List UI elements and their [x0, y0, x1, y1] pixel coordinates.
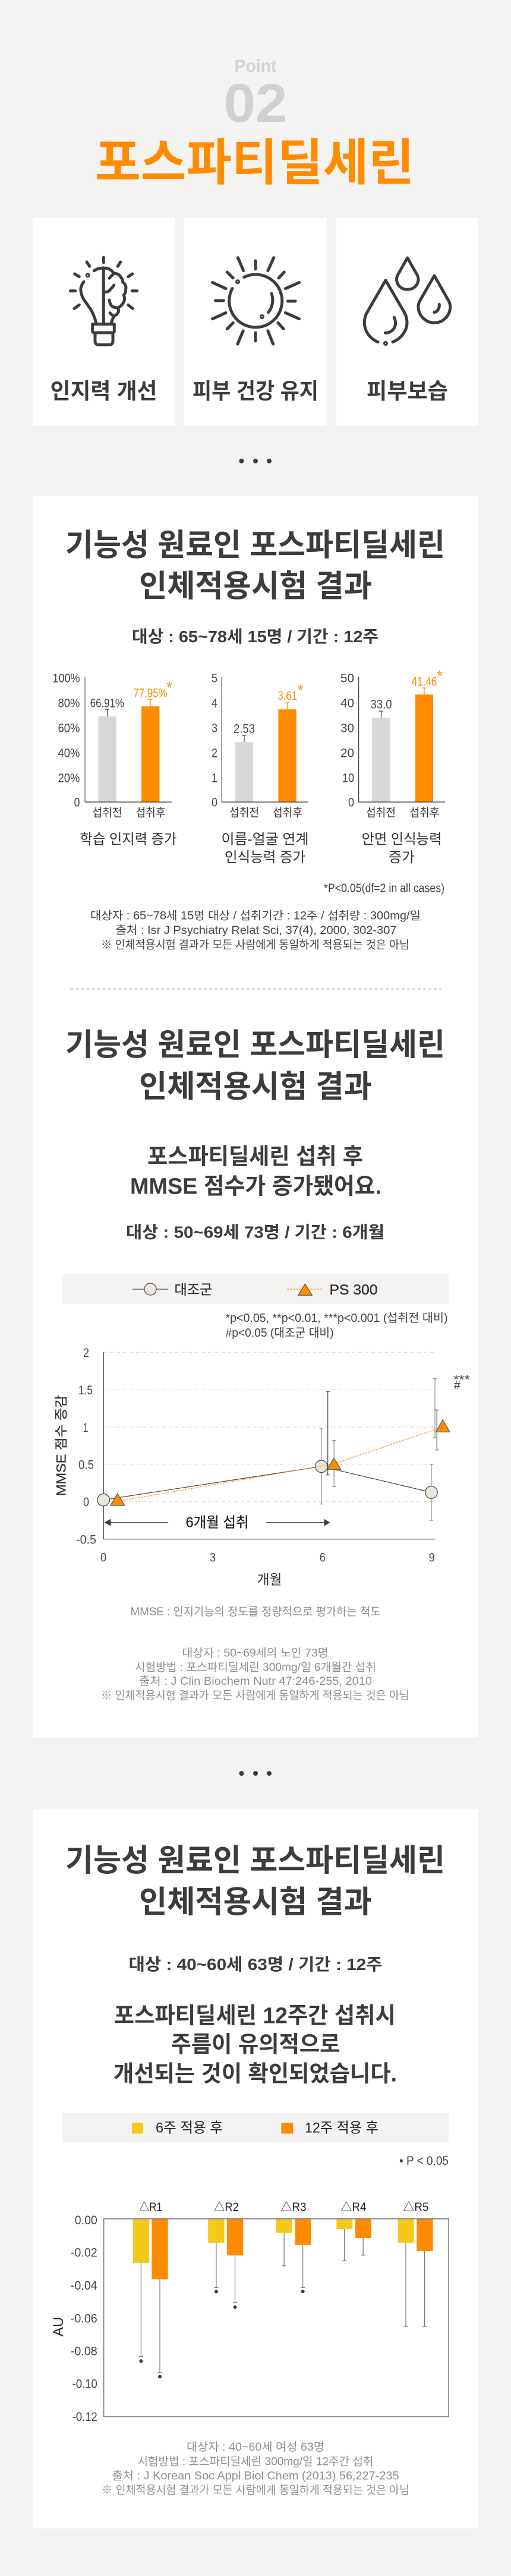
arrow: 6 month intake: 6개월 섭취 — [186, 1515, 249, 1530]
panel: clinical results 1 and 2 — [33, 496, 478, 1737]
line chart: MMSE change: 0.5 — [78, 1458, 94, 1472]
significance notes: #p<0.05 (대조군 대비) — [226, 1326, 334, 1340]
bar chart: learning cognition: 77.95% — [133, 686, 168, 700]
bar chart: facial recognition: 섭취전 — [366, 806, 396, 819]
study notes: ※ 인체적용시험 결과가 모든 사람에게 동일하게 적용되는 것은 아님 — [101, 939, 409, 952]
study notes: 출처 : J Clin Biochem Nutr 47:246-255, 2010 — [139, 1675, 372, 1688]
study notes: 대상자 : 65~78세 15명 대상 / 섭취기간 : 12주 / 섭취량 : 300mg/일 — [90, 909, 421, 922]
wrinkle statement: 개선되는 것이 확인되었습니다. — [113, 2062, 397, 2086]
bar chart: learning cognition: 섭취전 — [93, 806, 122, 819]
bar chart: name-face recognition: 2.53 — [234, 721, 255, 735]
heading: first trial — [65, 529, 445, 604]
heading: third trial — [65, 1844, 445, 1920]
line chart: MMSE change: 0 — [100, 1551, 106, 1565]
card label: 인지력 개선 — [50, 379, 157, 403]
line chart: MMSE change: 3 — [210, 1551, 216, 1565]
bar chart: facial recognition: * — [437, 667, 443, 684]
y axis ticks: -0.10 — [72, 2376, 97, 2391]
significance notes — [226, 1311, 448, 1340]
bar chart: learning cognition: 섭취후 — [135, 806, 165, 819]
heading: second trial — [65, 1028, 445, 1104]
bar chart: name-face recognition: 0 — [212, 795, 217, 809]
trial subject line: 대상 : 65~78세 15명 / 기간 : 12주 — [132, 627, 378, 646]
study notes: 대상자 : 40~60세 여성 63명 — [187, 2441, 324, 2454]
card: moisturizing — [336, 218, 478, 426]
heading: third trial: 기능성 원료인 포스파티딜세린 — [65, 1844, 445, 1879]
chart captions — [80, 832, 442, 866]
column labels — [139, 2201, 429, 2214]
benefit cards — [33, 218, 478, 426]
bar chart: name-face recognition: 4 — [212, 696, 217, 711]
PS 300 series — [111, 1420, 450, 1505]
bar chart: name-face recognition: 섭취후 — [273, 806, 302, 819]
significance marks: # — [454, 1378, 460, 1393]
heading: second trial: 기능성 원료인 포스파티딜세린 — [65, 1028, 445, 1063]
bar chart: facial recognition: 10 — [342, 771, 354, 785]
icon: light bulb with brain — [70, 257, 137, 345]
significance marks: *** — [453, 1372, 471, 1387]
y axis title: AU — [51, 2317, 67, 2337]
card: skin health — [184, 218, 327, 426]
chart legend: 대조군 — [175, 1282, 213, 1298]
bar chart: learning cognition: 0 — [74, 795, 80, 809]
column labels: △R1 — [139, 2201, 162, 2214]
line chart: MMSE change: 1 — [83, 1420, 88, 1435]
bar chart: facial recognition — [340, 667, 445, 819]
study notes: 출처 : J Korean Soc Appl Biol Chem (2013) 56,227-235 — [112, 2470, 399, 2483]
line chart: MMSE change: 9 — [429, 1551, 435, 1565]
line chart: MMSE change: 6 — [320, 1551, 326, 1565]
chart legend — [62, 2113, 449, 2143]
main title: 포스파티딜세린 — [95, 135, 414, 191]
study notes — [101, 1647, 409, 1702]
bar chart: learning cognition: 60% — [58, 721, 80, 735]
bar chart: name-face recognition: 3 — [212, 721, 217, 735]
heading: first trial: 인체적용시험 결과 — [139, 570, 372, 604]
error bars — [139, 2229, 427, 2373]
bar chart: name-face recognition: 3.61 — [277, 689, 297, 703]
x axis title: 개월 — [257, 1572, 282, 1587]
bar chart: facial recognition: 20 — [340, 746, 354, 760]
plot frame — [104, 2219, 449, 2417]
heading: third trial: 인체적용시험 결과 — [139, 1886, 372, 1920]
chart captions: 인식능력 증가 — [225, 850, 305, 866]
card label: 피부보습 — [367, 379, 448, 403]
significance note: • P < 0.05 — [399, 2154, 449, 2168]
bar chart: name-face recognition: * — [298, 681, 304, 699]
chart legend: 6주 적용 후 — [156, 2120, 223, 2136]
line chart: MMSE change: -0.5 — [76, 1533, 96, 1547]
study notes — [102, 2441, 409, 2496]
column labels: △R4 — [341, 2201, 366, 2214]
bar chart: facial recognition: 0 — [348, 795, 354, 809]
column labels: △R3 — [280, 2201, 307, 2214]
significance marks — [453, 1372, 471, 1393]
significance note: *P<0.05(df=2 in all cases) — [324, 882, 444, 895]
MMSE statement: 포스파티딜세린 섭취 후 — [147, 1144, 363, 1169]
y axis ticks: 0.00 — [75, 2213, 97, 2227]
line chart: MMSE change: 2 — [83, 1346, 89, 1360]
y axis ticks: -0.06 — [71, 2311, 97, 2325]
y axis ticks: -0.08 — [71, 2344, 97, 2359]
bar chart: learning cognition: 66.91% — [90, 696, 124, 711]
MMSE definition: MMSE : 인지기능의 정도를 정량적으로 평가하는 척도 — [131, 1605, 380, 1618]
chart legend — [62, 1274, 449, 1304]
bar chart: name-face recognition: 5 — [212, 671, 217, 686]
bar chart: facial recognition: 섭취후 — [410, 806, 440, 819]
line chart: MMSE change: 0 — [83, 1495, 89, 1509]
card label: 피부 건강 유지 — [193, 379, 318, 403]
bar chart: learning cognition: * — [166, 678, 172, 696]
header: point number and title — [95, 56, 414, 191]
wrinkle statement: 포스파티딜세린 12주간 섭취시 — [114, 2004, 396, 2029]
study notes — [90, 909, 421, 952]
icon: water drops — [364, 258, 450, 345]
MMSE statement — [130, 1144, 381, 1199]
study notes: 대상자 : 50~69세의 노인 73명 — [182, 1647, 328, 1660]
study notes: 시험방법 : 포스파티딜세린 300mg/일 6개월간 섭취 — [135, 1661, 376, 1674]
point number: 02 — [223, 73, 288, 134]
bar chart: learning cognition: 20% — [58, 771, 80, 785]
significance dots — [139, 2290, 305, 2379]
y axis ticks: -0.04 — [71, 2278, 97, 2293]
bar chart: name-face recognition — [212, 671, 308, 819]
separator dots — [239, 459, 272, 463]
chart captions: 이름-얼굴 연계 — [221, 832, 309, 847]
y axis title: MMSE 점수 증감 — [53, 1395, 69, 1496]
bar chart: name-face recognition: 1 — [212, 771, 217, 785]
MMSE statement: MMSE 점수가 증가됐어요. — [130, 1175, 381, 1199]
bar chart: name-face recognition: 섭취전 — [229, 806, 259, 819]
arrow: 6 month intake — [105, 1515, 330, 1530]
bar chart: facial recognition: 41.46 — [411, 674, 437, 689]
chart legend: 12주 적용 후 — [305, 2120, 378, 2136]
heading: first trial: 기능성 원료인 포스파티딜세린 — [65, 529, 445, 563]
line chart: MMSE change — [53, 1346, 471, 1587]
bar chart: learning cognition: 80% — [58, 696, 80, 711]
icon: sun — [213, 258, 299, 344]
separator dots — [239, 1771, 272, 1776]
heading: second trial: 인체적용시험 결과 — [139, 1070, 372, 1104]
chart captions: 증가 — [389, 850, 415, 866]
y axis ticks: -0.02 — [71, 2246, 97, 2260]
orange bars — [152, 2219, 433, 2279]
line chart: MMSE change: 1.5 — [78, 1383, 93, 1397]
bar chart: facial recognition: 40 — [340, 696, 354, 711]
study notes: ※ 인체적용시험 결과가 모든 사람에게 동일하게 적용되는 것은 아님 — [101, 1689, 409, 1702]
point label: Point — [234, 56, 277, 76]
error bars — [320, 1379, 439, 1520]
bar chart: name-face recognition: 2 — [212, 746, 217, 760]
bar chart: learning cognition: 40% — [58, 746, 80, 760]
bar chart: facial recognition: 50 — [340, 671, 354, 686]
chart legend: PS 300 — [329, 1282, 378, 1298]
significance notes: *p<0.05, **p<0.01, ***p<0.001 (섭취전 대비) — [226, 1311, 448, 1325]
study notes: ※ 인체적용시험 결과가 모든 사람에게 동일하게 적용되는 것은 아님 — [102, 2483, 409, 2496]
column labels: △R2 — [214, 2201, 239, 2214]
y axis ticks: -0.12 — [72, 2410, 97, 2424]
card: cognition — [33, 218, 175, 426]
chart captions: 안면 인식능력 — [361, 832, 442, 847]
study notes: 시험방법 : 포스파티딜세린 300mg/일 12주간 섭취 — [138, 2455, 373, 2468]
yellow bars — [133, 2219, 414, 2263]
bar chart: learning cognition — [52, 671, 172, 819]
bar chart: wrinkle parameters — [51, 2201, 449, 2424]
column labels: △R5 — [403, 2201, 429, 2214]
trial subject line: 대상 : 40~60세 63명 / 기간 : 12주 — [128, 1955, 383, 1974]
bar chart: facial recognition: 30 — [340, 721, 354, 735]
trial subject line: 대상 : 50~69세 73명 / 기간 : 6개월 — [126, 1223, 384, 1242]
bar chart: facial recognition: 33.0 — [371, 697, 392, 712]
y axis ticks — [71, 2213, 97, 2424]
wrinkle statement: 주름이 유의적으로 — [171, 2032, 340, 2057]
bar chart: learning cognition: 100% — [52, 671, 80, 686]
panel: clinical result 3 — [33, 1810, 478, 2528]
study notes: 출처 : Isr J Psychiatry Relat Sci, 37(4), 2000, 302-307 — [115, 924, 397, 937]
control series — [97, 1460, 437, 1506]
chart captions: 학습 인지력 증가 — [80, 832, 177, 847]
wrinkle statement — [113, 2004, 397, 2086]
